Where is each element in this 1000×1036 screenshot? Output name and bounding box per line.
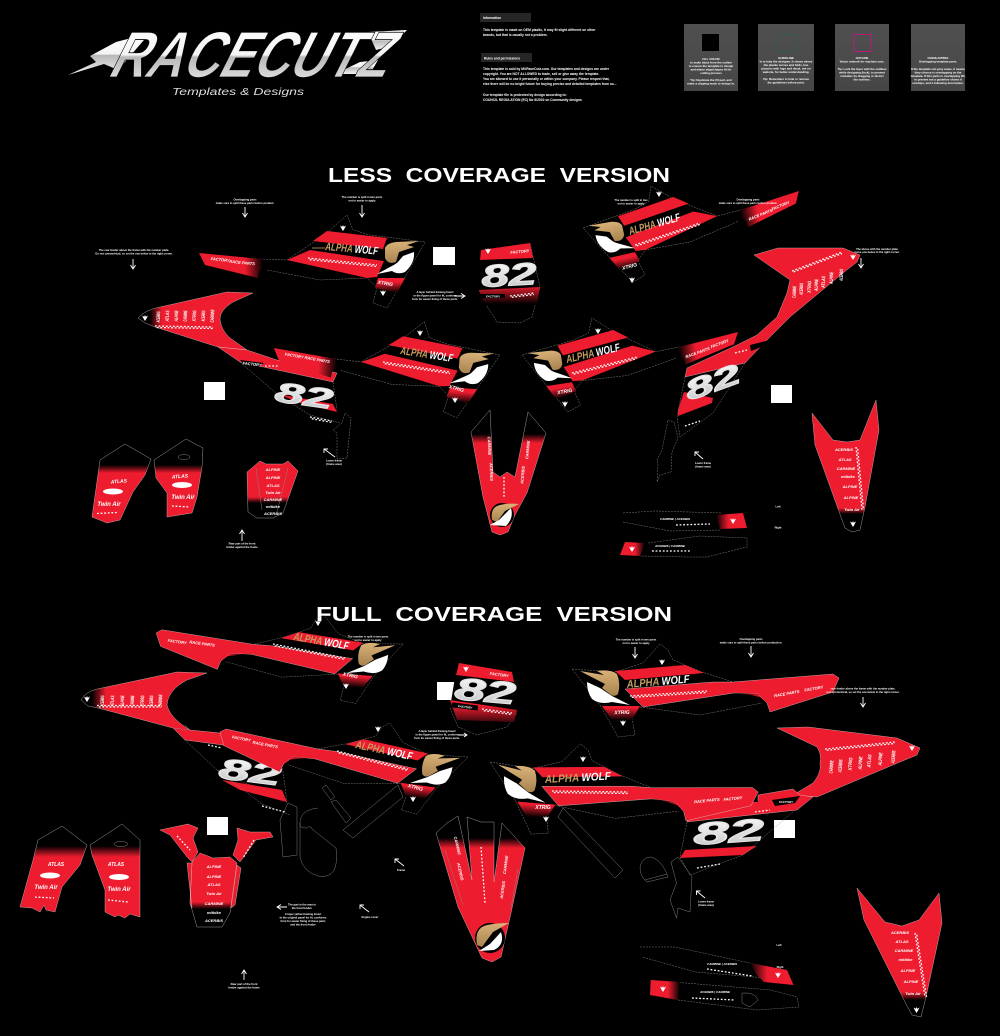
swingarm upper full [640,947,794,985]
front fender less: ACERBIS [489,462,494,481]
note: overlapping full [720,637,782,657]
note: overlapping left: make sure to split these parts before product. [216,201,274,205]
panel: shroud full lower right: ALPHA WOLF [544,771,611,786]
note: rear part full: Rear part of the front [231,982,257,986]
panel: less seat and side right: 82 [680,358,745,407]
legend panel: outline: the outlines. [853,78,871,82]
note: overlapping full: make sure to split these parts before production. [720,640,782,644]
note: engine cover: Engine cover [362,915,378,919]
panel: shroud full upper left: ALPHA WOLF [292,631,350,653]
mud plate less: Twin Air [265,490,281,495]
note: frame [395,859,406,872]
panel: shroud less upper right: FACTORY [771,200,790,211]
panel: less seat and side right: ATLAS [821,275,827,289]
note: number split full right [616,638,657,658]
note: rear part full [228,970,260,990]
panel: less seat and side left: ACERBIS [201,310,207,322]
note: overlapping full: Overlapping parts [740,637,763,641]
note: layer behind: in the figure panel for fit, conform [414,294,457,298]
legend panel: guideline: the guidelines before print. [767,80,805,84]
legend panel: outline: Vector artwork for machine cuts. [840,60,885,64]
panel: shroud less lower left: XTRIG [447,384,465,394]
tank right less: ATLAS [171,473,189,481]
note: number split full right: not to easier to apply [622,641,650,645]
note: rear fender right: The above with the number plate [856,247,898,251]
note: rear part: fender against the frame [226,545,258,549]
panel: shroud full upper right: XTRIG [613,710,630,716]
panel: shroud full upper left [152,602,405,707]
rear fender less: mitbike [841,474,856,479]
rear guard full: ALPINE [206,874,222,879]
panel: shroud full upper right: FACTORY [804,684,824,693]
panel: shroud less lower right: FACTORY [710,338,730,349]
swingarm lower full [650,980,799,1010]
legend panel: overlapping: OVERLAPPING [927,56,949,60]
panel: shroud full lower right [485,737,761,851]
panel: shroud full upper left: FACTORY [167,638,187,645]
logo wordmark: RACECUTZ [99,19,413,91]
panel: full seat and side left: XTRIG [140,695,146,707]
panel: shroud full lower left: ALPHA WOLF [354,739,414,763]
note: front fender part: and the front fender [290,922,316,926]
number plate less [479,243,540,323]
panel: shroud full lower left [213,701,471,820]
legend panel: fill color [684,24,738,91]
rear guard full [160,824,273,927]
rear guard full: ATLAS [206,882,221,887]
rear guard full: mitbike [207,910,222,915]
notes: less coverage [95,195,900,549]
legend panel: overlapping: template. If this parts is overlapping 2D, [911,74,966,78]
panel: less seat and side right: ALPINE [814,278,820,292]
information text block [480,13,617,102]
note: front fender part: The part in the area to [288,902,316,906]
panel: full seat and side left: ATLAS [110,695,116,707]
panel: full seat and side right: ACERBIS [891,750,897,764]
tank right full: Twin Air [107,887,131,893]
panel: shroud less lower right: XTRIG [556,388,573,396]
panel: full seat and side right: ACERBIS [838,759,844,773]
legend panel: fill color: Tip: Duplicate the fill part, and [690,78,732,82]
rear guard full: ALPINE [206,864,222,869]
note: rear fender left [95,248,173,269]
panel: full seat and side right: ALPINE [858,756,864,770]
panel: shroud less lower left [269,310,502,421]
panel: shroud less lower right [518,296,746,418]
panel: full seat and side right: CARMINE [829,760,835,774]
note: overlapping right: Overlapping parts [736,198,760,202]
rear fender less: CARMINE [837,466,856,471]
tank left full: Twin Air [34,885,58,891]
note: rear fender right: move one below in the right corner. [854,250,900,254]
front fender full [436,816,525,962]
legend panel: outline: mistakes by dragging or distort [840,74,884,78]
panel: shroud less upper left: ALPHA WOLF [324,241,379,258]
note: rear part: Rear part of the front [229,542,255,546]
note: lower frame full: Lower frame [698,900,714,904]
number plate less: 82 [481,256,537,294]
swingarm upper less [623,511,747,531]
note: number split full right: The number is split in two parts [616,638,657,642]
rear fender full: ATLAS [894,939,909,944]
note: left right full: Left [777,943,782,947]
panel: less seat and side left: FACTORY [242,361,262,368]
logo spikes [68,30,407,75]
note: layer full: in the figure panel for fit, conform [416,732,459,736]
panel: full seat and side right [680,727,920,875]
front fender less: ACERBIS [519,465,526,485]
panel: full seat and side left: CARMINE [158,694,164,708]
panel: shroud full upper left: XTRIG [341,671,358,681]
panel: less seat and side left: CARMINE [183,310,189,322]
note: overlapping right [719,198,777,205]
panel: less seat and side right [677,248,860,437]
legend panel: guideline: Is to help the designer. It shows where [760,60,813,64]
mud plate less: mitbike [266,504,281,509]
note: overlapping left: Overlapping parts [234,198,257,202]
front fender less: CARMINE [524,440,531,459]
tank left less: ATLAS [110,478,128,486]
number plate less: FACTORY [486,294,501,298]
panel: shroud full lower left: RACE PARTS [252,740,279,749]
panel: full seat and side right: ATLAS [867,754,873,768]
panel: shroud less lower right: RACE PARTS [685,346,711,359]
panel: less seat and side left [138,292,340,423]
tank left full: ATLAS [47,862,65,868]
panel: full seat and side left [81,672,290,815]
note: lower frame full: (frame area) [698,903,714,907]
note: number split left: not to easier to apply [348,198,376,202]
panel: less seat and side right: CARMINE [792,286,798,298]
rear guard full: ACERBIS [204,918,223,923]
tank right full: ATLAS [107,862,125,868]
note: number split left [342,195,383,217]
note: overlapping right: make sure to split these parts before product. [719,201,777,205]
panel: shroud full upper right [572,644,839,737]
note: layer full: A layer behind framing Insert [418,729,456,733]
rear fender full: ALPINE [900,968,916,973]
panel: less seat and side right: XTRIG [807,281,813,294]
panel: shroud less upper right: RACE PARTS [748,207,774,222]
panel: less seat and side left: ACERBIS [156,311,162,323]
note: number split full left: not to easier to apply [354,638,382,642]
tank left less [92,444,151,523]
panel: shroud full lower right: RACE PARTS [694,797,720,804]
panel: shroud full upper right: RACE PARTS [774,689,800,698]
tank right less [154,439,203,517]
note: rear fender full [827,686,900,707]
rear fender full: ACERBIS [890,930,909,935]
panel: shroud less lower left: FACTORY [284,351,304,360]
note: overlapping left [216,198,274,217]
panel: shroud full lower left: XTRIG [406,783,424,793]
note: front fender part [277,902,327,926]
legend panel: guideline: the plastic curves and folds, has [764,63,809,67]
note: number split full left: The number is split in two parts [348,634,389,638]
swingarm lower less: ACERBIS | CARMINE [654,544,686,548]
number plate less: FACTORY [510,248,530,255]
panel: less seat and side right: ACERBIS [839,269,845,282]
panel: less seat and side left: XTRIG [192,310,198,322]
mud plate less: ALPINE [265,475,281,480]
rules body: You are allowed to use it personally or within your company. Please respect that, [483,77,610,81]
legend panel: overlapping [911,24,966,91]
note: front fender part: the front fender. [292,906,312,910]
note: number split left: The number is split in two parts [342,195,383,199]
panel: full seat and side right: XTRIG [847,757,854,771]
note: number split right: not to easier to apply [617,202,645,206]
full coverage frame parts [280,785,692,918]
rear fender full: CARMINE [895,948,914,953]
legend panel: overlapping: Overlapping template parts. [919,60,957,64]
rear guard full: Twin Air [206,891,222,896]
panel: shroud less lower left: ALPHA WOLF [399,345,454,365]
rules body: Our template file is protected by design according to: [483,93,567,97]
lower frame right less [657,420,678,482]
rules body: COUNCIL REGULATION (EC) No 6/2002 on Community designs [483,98,582,102]
note: lower frame right: (frame area) [695,464,711,468]
swingarm upper full: CARMINE | ACERBIS [707,962,737,966]
panel: full seat and side left: ALPINE [120,695,126,707]
legend panel: overlapping: overlaps, and a following description. [912,81,964,85]
legend panel: fill color: cutting process [700,71,722,75]
panel: shroud full lower left: FACTORY [231,734,251,743]
rear fender less: Twin Air [844,507,860,512]
note: front fender part: A layer yellow framing Insert [285,912,321,916]
note: lower frame right: Lower frame [695,461,711,465]
front fender full: ACERBIS [456,861,465,881]
note: rear fender full: not symmetrical, so set the one below in the right corner. [827,690,900,694]
legend panel: guideline: website, for better understanding. [762,70,809,74]
legend panel: outline: while designing (lock), to prevent [838,70,885,74]
note: left right full [777,943,784,969]
legend panel: guideline: GUIDELINE [778,56,794,60]
title: less coverage: LESS COVERAGE VERSION [328,165,670,187]
rear guard full: CARMINE [205,901,224,906]
note: layer behind: A layer behind framing Insert [416,290,454,294]
note: left and right: Left [776,504,781,508]
panel: full seat and side right: 82 [692,812,765,852]
legend panel: outline: Tip: Lock the layer with the outlines [837,67,887,71]
panel: shroud less upper right [577,155,810,290]
white squares [204,247,795,838]
front fender full: CARMINE [453,836,462,856]
note: rear fender right [854,247,900,268]
note: rear fender left: Do not symmetrical, so set the one below in the right corner. [95,252,173,256]
note: lower frame left: Lower frame [326,458,342,462]
panel: less seat and side left: ALPINE [174,310,180,322]
number plate full: FACTORY [489,671,509,678]
legend panel: overlapping: to prevent not a guideline shows it [914,78,962,82]
rear fender less: ALPINE [843,495,859,500]
panel: full seat and side right: FACTORY [779,800,794,804]
legend panel: fill color: to make black from the outline [690,60,732,64]
legend panel: fill color: to ensure the template to design [689,64,733,68]
rear fender less: ACERBIS [834,447,853,452]
panel: shroud full upper right: ALPHA WOLF [625,674,690,691]
note: layer full [414,729,467,740]
tank left less: Twin Air [97,502,121,508]
note: rear part [226,530,258,549]
legend panel: fill color: and where edge/shapes fit for [691,68,732,72]
panel: shroud full lower right: XTRIG [534,805,551,811]
rules body: else there will be no bright future for buying precise and detailed templates from us... [483,82,617,86]
note: layer behind: form for easier fixing of these parts. [412,297,458,301]
panel: less seat and side right: ALPINE [829,271,835,285]
legend panel: guideline: Tip: Remember to hide or remove [763,77,809,81]
note: layer behind [412,290,465,301]
note: lower frame left: (frame area) [326,462,342,466]
rear fender less: ATLAS [837,457,852,462]
tank left full [20,826,87,912]
title: full coverage: FULL COVERAGE VERSION [316,604,672,626]
legend panel: guideline [758,24,814,91]
rear fender less: ALPINE [842,484,858,489]
logo: Racecutz [68,19,413,98]
panel: shroud less upper left [199,215,425,308]
panel: shroud less upper right: XTRIG [621,262,638,272]
legend panel: outline [835,24,889,91]
panel: less seat and side left: 82 [273,376,336,415]
panel: shroud full lower right: FACTORY [723,795,743,802]
rules heading: Rules and permissions [484,56,520,60]
panel: full seat and side left: ACERBIS [149,695,155,707]
legend panel: outline: OUTLINE [856,56,868,60]
number plate full [450,663,517,735]
front fender full: ACERBIS [499,880,506,900]
legend panel: fill color: make a clipping mask to design in. [687,82,735,86]
panel: full seat and side left: CARMINE [130,695,136,707]
note: lower frame full [696,891,714,907]
legend panel: overlapping: If the template can grey areas, it means [911,67,965,71]
note: lower frame left [324,449,342,466]
front fender less [471,410,546,535]
note: engine cover [360,905,378,919]
note: layer full: form for easier fixing of these parts. [414,736,460,740]
legend panel: overlapping: they choose is overlapping on the [915,70,962,74]
legend panel: fill color: FILL COLOR [702,57,721,61]
panel: shroud less upper left: FACTORY [210,256,230,263]
panel: shroud less upper left: RACE PARTS [229,259,255,266]
note: front fender part: in the original panel for fit, conforms [280,916,327,920]
notes: full coverage [228,634,900,990]
tank right full [90,824,140,918]
rear fender full [857,888,942,1017]
lower frame left less [333,413,351,459]
panel: full seat and side left: ACERBIS [100,695,106,707]
front fender less: CARMINE [487,437,492,456]
note: rear fender left: The rear fender above the frame with the number plate. [99,248,169,252]
mud plate less [247,461,298,518]
panel: shroud less lower left: RACE PARTS [304,355,331,364]
panel: shroud less lower right: ALPHA WOLF [564,342,621,366]
tank right less: Twin Air [171,495,195,501]
note: number split right: The number is split in two [614,198,648,202]
panel: full seat and side left: 82 [217,753,283,793]
mud plate less: ACERBIS [263,511,282,516]
panel: less seat and side right: ACERBIS [799,283,805,296]
information body: brands, but that is usually not a problem. [483,33,548,37]
note: lower frame right [695,452,711,468]
swingarm lower full: ACERBIS | CARMINE [699,990,731,994]
rear fender full: mitbike [898,957,913,962]
information body: This template is made on OEM plastic, it may fit slight different on other [483,28,596,32]
legend panel: guideline: pictures with logo and decal, not on [761,66,811,70]
panel: less seat and side left: CARMINE [210,309,216,323]
mud plate less: CARMINE [264,497,283,502]
rear fender full: ALPINE [903,979,919,984]
panel: shroud less upper left: XTRIG [376,280,393,288]
panel: full seat and side right: ALPINE [878,752,884,766]
note: front fender part: form for easier fixing of these parts [280,919,326,923]
panel: shroud full upper left: RACE PARTS [189,639,216,648]
logo tagline: Templates & Designs [172,86,305,98]
panel: less seat and side left: ATLAS [165,310,171,322]
note: frame: Frame [397,868,406,872]
rules body: copyright. You are NOT ALLOWED to trade, sell or give away the template. [483,72,599,76]
note: left right full: Right [777,965,784,969]
number plate full: 82 [453,671,517,711]
note: rear part full: fender against the frame [228,986,260,990]
information heading: Information [483,16,501,20]
rear fender full: Twin Air [905,991,921,996]
panel: shroud less upper right: ALPHA WOLF [627,212,682,238]
note: left and right [775,504,782,530]
front fender full: CARMINE [502,855,509,874]
swingarm lower less [620,536,747,557]
rules body: This template is sold by MXRaceCutz.com. Our templates and designs are under [483,67,610,71]
number plate full: FACTORY [458,704,473,710]
note: rear fender full: rear fender above the frame with the number plate. [831,686,896,690]
note: left and right: Right [775,526,782,530]
mud plate less: ATLAS [265,483,280,488]
rear fender less [812,400,879,532]
mud plate less: ALPINE [265,467,281,472]
swingarm upper less: CARMINE | ACERBIS [660,517,690,521]
